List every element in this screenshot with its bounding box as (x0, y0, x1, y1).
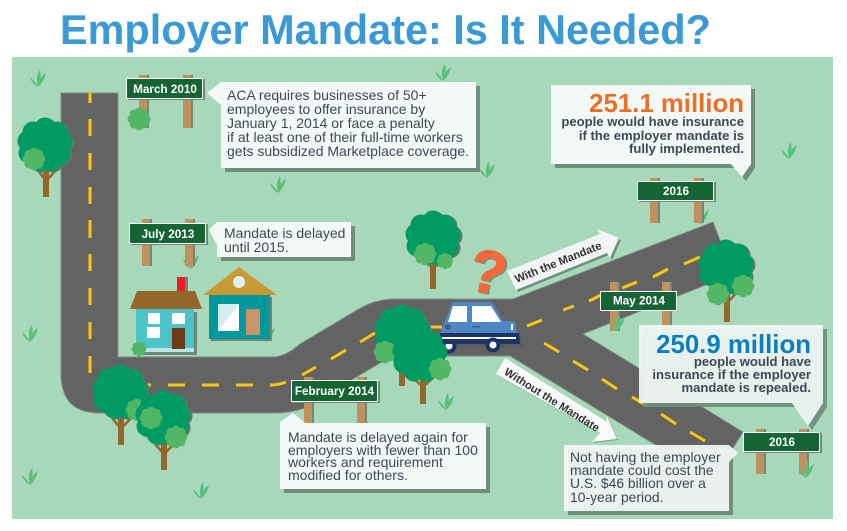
arrow: with the mandate: With the Mandate (513, 240, 604, 286)
callout: March 2010: ACA requires businesses of 50+ (227, 87, 427, 103)
callout: March 2010: if at least one of their full-time workers (227, 129, 463, 145)
bush by March sign (128, 108, 150, 130)
arrow: without the mandate (496, 358, 618, 443)
sign: 2016 without mandate: 2016 (769, 436, 795, 449)
sign: 2016 with mandate (638, 178, 716, 223)
callout: 250.9 million: 250.9 million (656, 331, 811, 359)
tree: road bend front (136, 390, 192, 470)
grass over sign posts (609, 314, 814, 478)
callout: 250.9 million: mandate is repealed. (681, 380, 811, 395)
house: gold-roofed house (203, 267, 277, 341)
sign: July 2013 (130, 219, 208, 266)
sign: 2016 without mandate (744, 429, 822, 474)
sign: February 2014 (292, 377, 380, 424)
callout: 250.9 million: insurance if the employer (652, 367, 811, 382)
arrow: without the mandate: Without the Mandate (502, 366, 601, 435)
callout: cost of no mandate: U.S. $46 billion over a (570, 475, 706, 491)
tree: junction front (392, 328, 451, 404)
sign: 2016 with mandate: 2016 (663, 185, 689, 198)
icon: question mark: ? (463, 235, 513, 309)
callout: 251.1 million: 251.1 million (589, 90, 744, 118)
callout: July 2013: until 2015. (224, 239, 289, 255)
tree: above junction (406, 210, 462, 289)
callout: 251.1 million: if the employer mandate is (579, 128, 744, 143)
callout: February 2014: workers and requirement (287, 454, 443, 470)
sign: May 2014: May 2014 (613, 294, 665, 308)
callout: 250.9 million (639, 325, 827, 430)
callout: February 2014: employers with fewer than 100 (288, 442, 478, 458)
callout: 251.1 million (551, 85, 755, 181)
callout: 251.1 million: fully implemented. (629, 141, 744, 156)
road centre dashes (90, 93, 730, 457)
tree: left of road (18, 118, 74, 197)
callout: February 2014 (280, 413, 490, 493)
house: teal cottage (130, 277, 202, 356)
sign: February 2014: February 2014 (295, 385, 375, 398)
callout: July 2013 (209, 222, 355, 261)
title: Employer Mandate: Is It Needed? (60, 7, 711, 53)
icon: question mark: ? (465, 237, 514, 310)
arrow: with the mandate (507, 229, 621, 292)
callout: cost of no mandate (564, 445, 738, 515)
sign: March 2010: March 2010 (133, 83, 197, 96)
callout: cost of no mandate: mandate could cost the (570, 462, 714, 478)
grass tufts (22, 64, 797, 499)
callout: February 2014: Mandate is delayed again for (288, 429, 468, 445)
callout: February 2014: modified for others. (288, 467, 408, 483)
callout: July 2013: Mandate is delayed (224, 225, 345, 241)
callout: March 2010 (207, 82, 480, 172)
road network (61, 93, 743, 480)
tree: upper branch (698, 240, 756, 322)
callout: March 2010: January 1, 2014 or face a penalty (227, 115, 435, 131)
tree: junction back (374, 304, 432, 386)
sign: May 2014 (600, 282, 676, 331)
callout: March 2010: employees to offer insurance by (227, 101, 425, 117)
callout: March 2010: gets subsidized Marketplace coverage. (227, 143, 469, 159)
sign: March 2010 (126, 75, 205, 128)
car (440, 302, 523, 354)
callout: cost of no mandate: 10-year period. (570, 489, 663, 505)
tree: road bend (92, 364, 150, 445)
sign: July 2013: July 2013 (142, 228, 195, 241)
callout: 250.9 million: people would have (694, 354, 811, 369)
callout: cost of no mandate: Not having the employer (570, 449, 721, 465)
callout: 251.1 million: people would have insurance (561, 114, 744, 129)
